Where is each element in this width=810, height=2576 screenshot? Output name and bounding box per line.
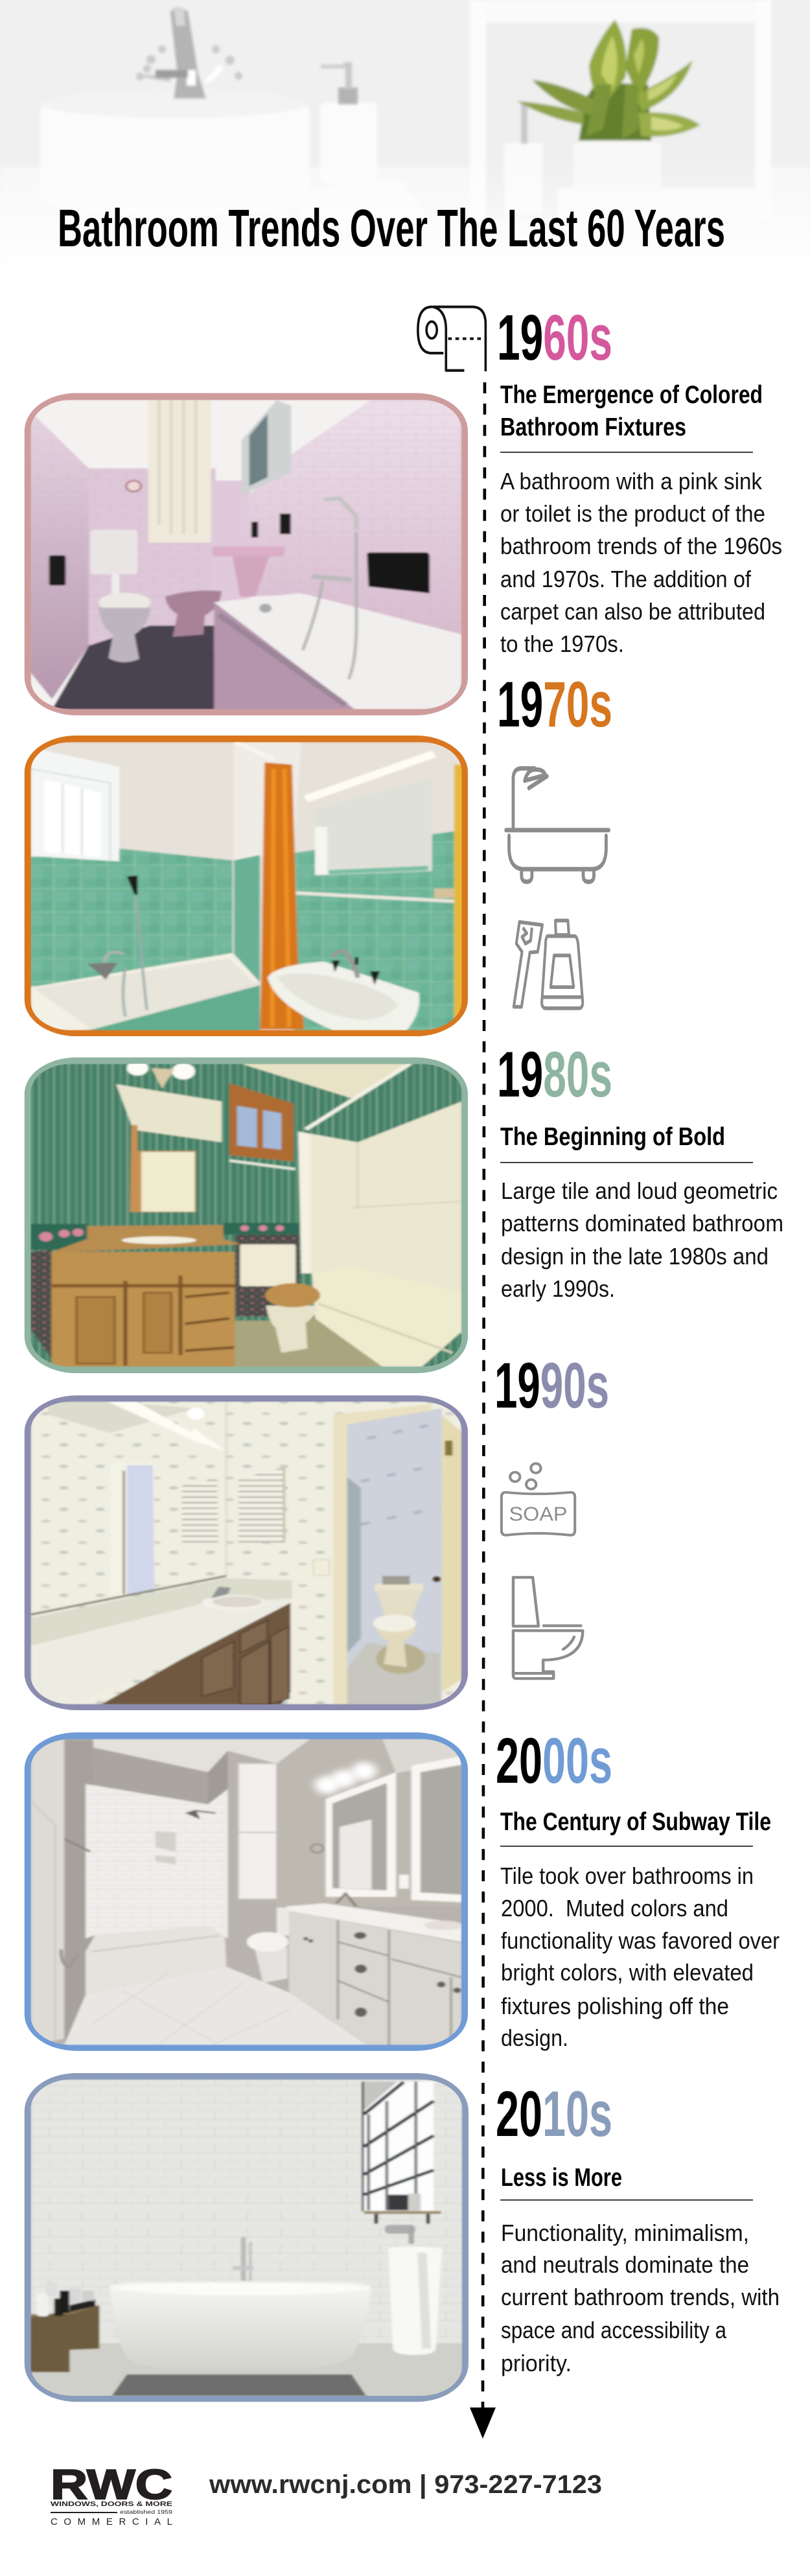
- footer contact: website and phone: www.rwcnj.com | 973-227-7123: [209, 2470, 602, 2499]
- 2000s body text: bright colors, with elevated: [501, 1959, 754, 1986]
- 2000s body text: Tile took over bathrooms in: [500, 1862, 754, 1889]
- 2010s body text: current bathroom trends, with: [501, 2284, 780, 2310]
- photo panel: 1970s green tile bathroom: [25, 736, 468, 1036]
- 1960s body text: [500, 468, 782, 657]
- photo panel: 1960s pink bathroom: [25, 393, 468, 715]
- 2000s body text: [500, 1862, 780, 2051]
- photo panel: 1990s shell wallpaper bathroom: [25, 1395, 468, 1710]
- 2000s body text: design.: [501, 2025, 568, 2051]
- 1960s year heading: 1960s: [497, 301, 612, 373]
- 1980s year heading: 1980s: [497, 1038, 612, 1110]
- 2000s body text: fixtures polishing off the: [501, 1993, 729, 2019]
- icon: bathtub with shower: [506, 769, 608, 882]
- 1980s subheading: The Beginning of Bold: [500, 1123, 725, 1151]
- icon: toilet: [513, 1577, 583, 1678]
- 1960s body text: to the 1970s.: [500, 631, 624, 657]
- logo: RWC Windows, Doors & More Commercial: [51, 2461, 173, 2527]
- 1960s body text: A bathroom with a pink sink: [500, 468, 763, 494]
- 1990s year heading: 1990s: [494, 1349, 609, 1421]
- icon: toilet paper roll: [418, 307, 485, 371]
- 1960s body text: carpet can also be attributed: [500, 598, 765, 625]
- photo panel: 1980s green wallpaper bathroom: [25, 1058, 468, 1373]
- 1960s subheading: [500, 381, 763, 441]
- 2010s body text: and neutrals dominate the: [501, 2251, 749, 2278]
- 1980s body text: patterns dominated bathroom: [501, 1210, 783, 1236]
- 1960s body text: and 1970s. The addition of: [500, 566, 752, 592]
- icon: toothbrush and bottle: [514, 920, 583, 1008]
- 2010s year heading: 2010s: [496, 2078, 612, 2150]
- 2010s body text: Functionality, minimalism,: [501, 2220, 749, 2246]
- 1960s subheading: Bathroom Fixtures: [500, 413, 686, 441]
- logo: RWC Windows, Doors & More Commercial: established 1959: [120, 2509, 173, 2515]
- 2000s body text: 2000. Muted colors and: [501, 1895, 728, 1921]
- header photo: blurred white sink and plant: [0, 0, 810, 305]
- 1970s year heading: 1970s: [497, 668, 612, 740]
- 2010s body text: priority.: [501, 2350, 572, 2376]
- 1980s body text: [501, 1178, 783, 1302]
- 1980s body text: design in the late 1980s and: [501, 1243, 769, 1270]
- 1960s body text: or toilet is the product of the: [500, 500, 765, 527]
- 2000s body text: functionality was favored over: [501, 1927, 780, 1954]
- 1960s body text: bathroom trends of the 1960s: [500, 533, 782, 559]
- photo panel: 2000s subway tile bathroom: [25, 1732, 468, 2051]
- 1980s body text: early 1990s.: [501, 1275, 615, 1302]
- logo: RWC Windows, Doors & More Commercial: WINDOWS, DOORS & MORE: [51, 2500, 172, 2508]
- 1980s body text: Large tile and loud geometric: [501, 1178, 778, 1204]
- logo: RWC Windows, Doors & More Commercial: COMMERCIAL: [51, 2516, 172, 2527]
- photo panel: 2010s minimalist bathroom: [25, 2073, 469, 2402]
- logo: RWC Windows, Doors & More Commercial: RWC: [51, 2461, 172, 2508]
- icon: soap bar with bubbles: [502, 1463, 575, 1535]
- 2010s body text: space and accessibility a: [501, 2317, 727, 2343]
- 2010s body text: [501, 2220, 780, 2376]
- 2000s year heading: 2000s: [496, 1724, 612, 1796]
- arrowhead at end of timeline: [470, 2408, 496, 2439]
- icon: soap bar with bubbles: SOAP: [509, 1503, 568, 1526]
- timeline: dashed vertical line: [483, 382, 485, 2408]
- 2010s subheading: Less is More: [501, 2164, 622, 2192]
